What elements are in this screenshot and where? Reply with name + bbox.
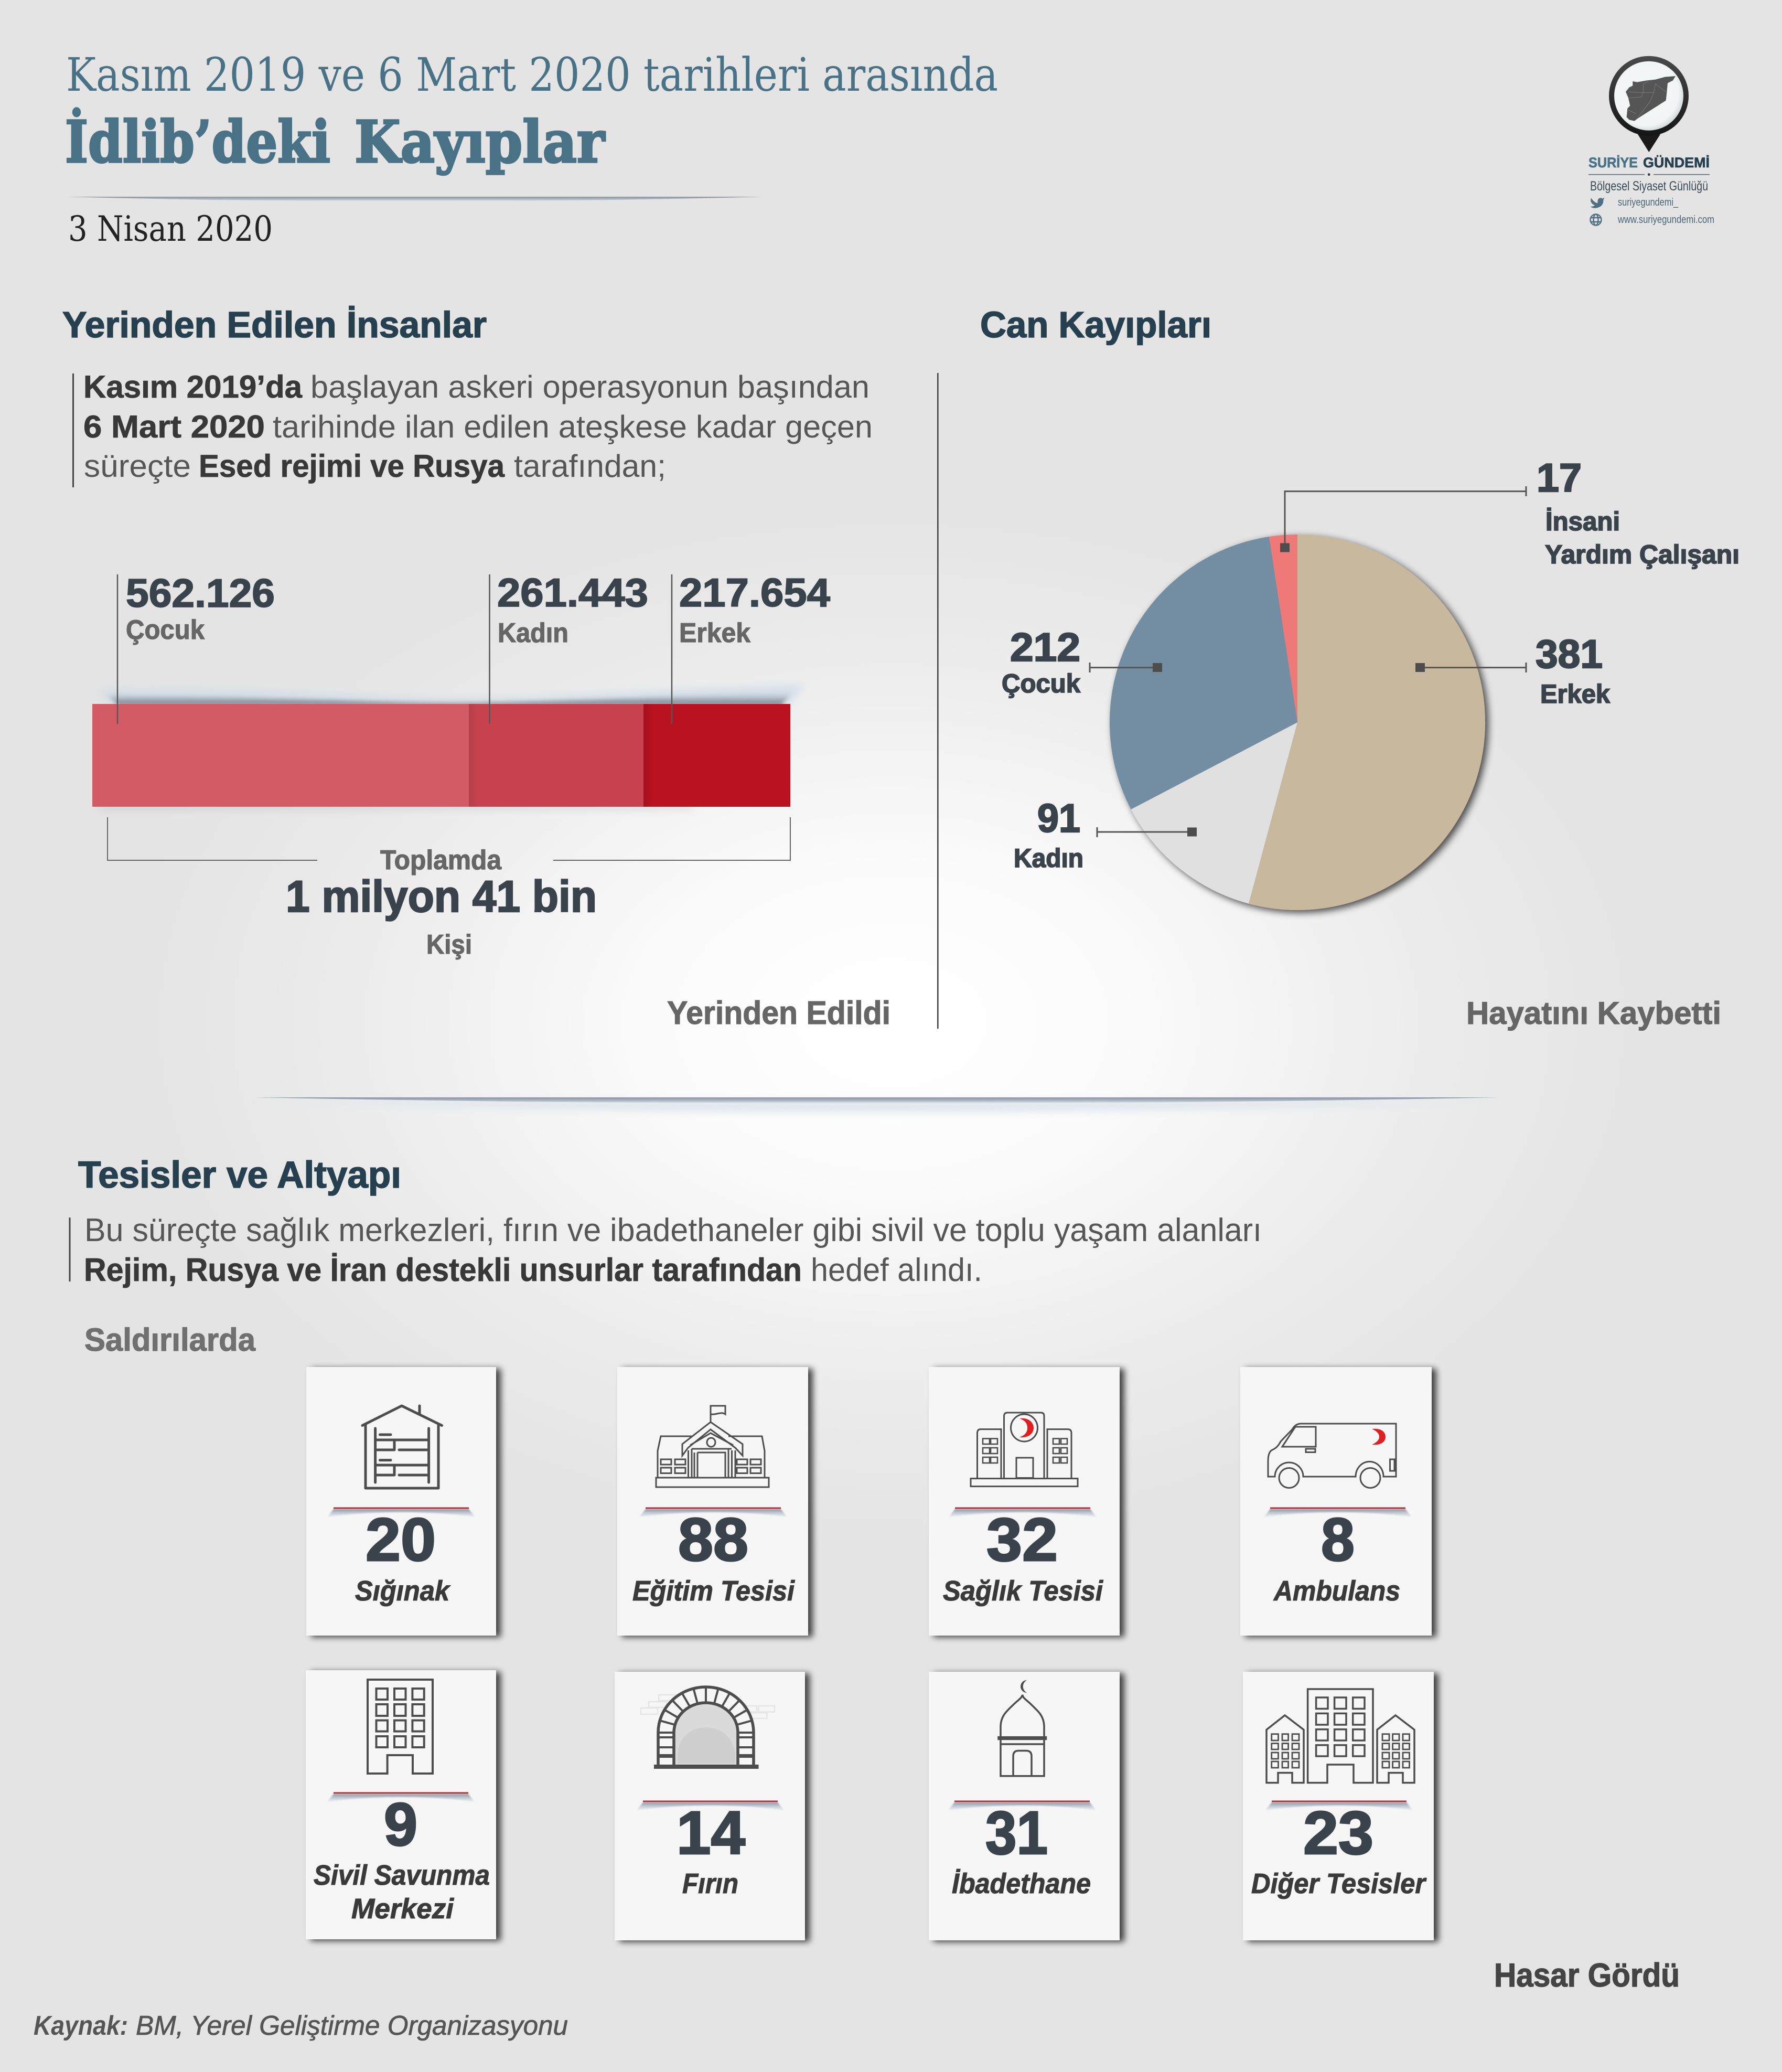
value: 32 — [986, 1505, 1058, 1574]
pie label: 91 — [1014, 796, 1197, 873]
divider shadow — [327, 1509, 475, 1517]
label: Diğer Tesisler — [1251, 1868, 1427, 1899]
source: BM, Yerel Geliştirme Organizasyonu — [136, 2011, 568, 2041]
label: Ambulans — [1273, 1575, 1400, 1607]
pie label: 91: Kadın — [1014, 843, 1083, 873]
bar label: Kadın — [490, 571, 648, 724]
label: Fırın — [682, 1868, 738, 1899]
value: 31 — [985, 1799, 1048, 1867]
logo: Suriye Gündemi: GÜNDEMİ — [1643, 155, 1710, 170]
bar segment: Erkek — [643, 704, 790, 807]
pie label: 17 — [1280, 456, 1740, 569]
logo: Suriye Gündemi — [1588, 56, 1714, 226]
twitter handle: suriyegundemi_ — [1618, 197, 1679, 208]
value: 9 — [384, 1790, 417, 1859]
label: Eğitim Tesisi — [632, 1575, 795, 1607]
text block: başlayan askeri operasyonun başından — [310, 369, 869, 404]
divider shadow — [949, 1509, 1097, 1517]
divider shadow — [637, 1802, 784, 1810]
heading: Can Kayıpları — [980, 304, 1211, 345]
vertical divider — [937, 373, 939, 1029]
panel: facilities intro — [69, 1155, 1262, 1358]
panel: deaths — [980, 304, 1740, 1031]
label: Sığınak — [355, 1575, 451, 1607]
date: 3 Nisan 2020 — [68, 209, 273, 249]
slice: Kadın 91 — [1131, 722, 1297, 904]
icon: ambulance — [1268, 1424, 1396, 1488]
bar label: Erkek: 217.654 — [679, 571, 830, 615]
card: İbadethane — [929, 1672, 1120, 1940]
divider shadow — [639, 1509, 787, 1517]
subtitle: Kasım 2019 ve 6 Mart 2020 tarihleri arasında — [66, 48, 998, 102]
icon: map pin with Syria map — [1609, 56, 1689, 152]
logo tagline: Bölgesel Siyaset Günlüğü — [1590, 179, 1708, 194]
pie label: 381: Erkek — [1540, 679, 1610, 709]
text block — [69, 1212, 1262, 1288]
pie label: 212 — [1002, 625, 1162, 698]
label: İbadethane — [952, 1868, 1091, 1899]
pie label: 381: 381 — [1536, 632, 1603, 677]
icon: civil defence building — [368, 1680, 433, 1774]
text block: tarafından; — [514, 448, 666, 484]
slice: aid worker 17 — [1269, 535, 1297, 722]
bar label: Çocuk: 562.126 — [126, 571, 275, 616]
pie label: 91: 91 — [1037, 796, 1080, 841]
icon: hospital — [971, 1413, 1078, 1487]
panel: displaced people — [62, 304, 890, 1031]
card: Fırın — [615, 1672, 805, 1940]
pie label: 17: Yardım Çalışanı — [1545, 540, 1740, 569]
icon: twitter — [1591, 198, 1604, 208]
text block — [72, 369, 873, 487]
icon: shelter — [362, 1406, 442, 1488]
card: Sivil Savunma Merkezi: Merkezi — [351, 1893, 454, 1925]
card: Diğer Tesisler — [1243, 1672, 1434, 1940]
value: 14 — [677, 1799, 745, 1867]
heading: Tesisler ve Altyapı — [78, 1155, 401, 1196]
stacked bar chart — [92, 685, 805, 809]
bar label: Kadın: Kadın — [498, 618, 568, 648]
main title — [65, 108, 606, 176]
icon: globe — [1590, 214, 1602, 226]
main title: İdlib’deki — [65, 108, 330, 176]
bar label: Erkek: Erkek — [679, 618, 750, 648]
title block — [65, 48, 998, 249]
bar label: Erkek — [672, 571, 830, 724]
icon: oven — [641, 1687, 775, 1769]
total — [286, 845, 597, 960]
icon: buildings — [1266, 1689, 1414, 1783]
text block: Bu süreçte sağlık merkezleri, fırın ve ibadethaneler gibi sivil ve toplu yaşam alanları — [84, 1212, 1262, 1248]
bar label: Çocuk: Çocuk — [126, 615, 205, 645]
pie label: 212: Çocuk — [1002, 669, 1080, 698]
value: 20 — [366, 1505, 436, 1574]
website: www.suriyegundemi.com — [1617, 214, 1714, 226]
pie label: 381 — [1415, 632, 1610, 709]
pie label: 17: 17 — [1537, 456, 1582, 500]
heading: Yerinden Edilen İnsanlar — [62, 304, 487, 345]
divider shadow — [948, 1802, 1096, 1810]
text block: 6 Mart 2020 — [83, 409, 265, 444]
divider shadow — [327, 1794, 475, 1802]
divider shadow — [1265, 1802, 1413, 1810]
divider shadow — [1264, 1509, 1412, 1517]
text block: Kasım 2019’da — [83, 369, 303, 404]
source: Kaynak: — [34, 2011, 128, 2041]
icon: mosque dome — [998, 1680, 1047, 1776]
caption: damaged: Hasar Gördü — [1494, 1957, 1680, 1994]
bar label: Kadın: 261.443 — [497, 571, 648, 615]
card: Sağlık Tesisi — [929, 1367, 1120, 1636]
card: Ambulans — [1240, 1367, 1432, 1636]
card: Eğitim Tesisi — [617, 1367, 808, 1636]
bar label: Çocuk — [117, 571, 275, 724]
pie chart — [1110, 535, 1485, 910]
icon: school — [656, 1406, 769, 1487]
text block: Esed rejimi ve Rusya — [199, 448, 505, 484]
text block: hedef alındı. — [811, 1252, 982, 1288]
card: Sivil Savunma Merkezi — [306, 1670, 496, 1939]
label: Sağlık Tesisi — [943, 1575, 1103, 1607]
value: 8 — [1321, 1505, 1355, 1574]
total: 1 milyon 41 bin — [286, 872, 597, 921]
pie label: 17: İnsani — [1545, 507, 1620, 536]
text block: süreçte — [84, 448, 191, 484]
card: Sığınak — [306, 1367, 496, 1636]
subheading: Saldırılarda — [84, 1322, 256, 1358]
slice: Erkek 381 — [1249, 535, 1485, 910]
main title: Kayıplar — [355, 108, 606, 176]
caption: Yerinden Edildi — [667, 995, 890, 1031]
bar segment: Kadın — [469, 704, 643, 807]
value: 88 — [678, 1505, 748, 1574]
pie label: 212: 212 — [1010, 625, 1080, 670]
total: Toplamda — [380, 845, 502, 875]
value: 23 — [1303, 1799, 1373, 1867]
text block: tarihinde ilan edilen ateşkese kadar geçen — [273, 409, 873, 444]
logo name: SURİYE — [1588, 155, 1638, 170]
text block: Rejim, Rusya ve İran destekli unsurlar tarafından — [84, 1252, 802, 1288]
caption: Hayatını Kaybetti — [1466, 996, 1721, 1031]
label: Sivil Savunma — [314, 1860, 490, 1891]
total: Kişi — [426, 930, 472, 960]
slice: Çocuk 212 — [1110, 537, 1297, 809]
bar segment: Çocuk — [92, 704, 469, 807]
total bracket — [108, 817, 790, 860]
